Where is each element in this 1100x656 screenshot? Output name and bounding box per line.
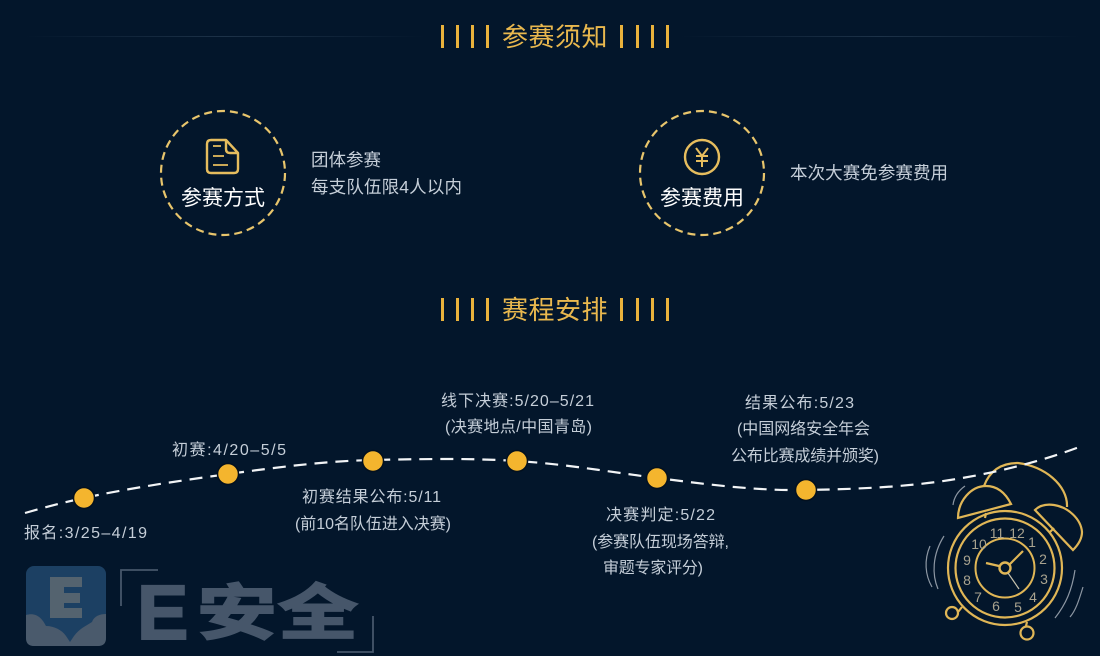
icon: alarm clock: [926, 463, 1083, 640]
clock numerals: 4: [1029, 589, 1037, 605]
heading: 参赛须知: [441, 22, 669, 52]
milestone: 决赛判定: [592, 468, 729, 577]
milestone: 决赛判定: (参赛队伍现场答辩,: [592, 532, 729, 551]
watermark wordmark: E: [137, 570, 188, 656]
clock numerals: 1: [1028, 534, 1036, 550]
clock numerals: 12: [1009, 525, 1025, 541]
bracket lines: [121, 570, 373, 652]
dashed circle badge: [161, 111, 285, 235]
text block: team rules: 团体参赛: [311, 150, 381, 170]
clock numerals: 8: [963, 572, 971, 588]
milestone: 决赛判定: 审题专家评分): [603, 559, 703, 577]
clock numerals: 2: [1039, 551, 1047, 567]
vibration lines: [926, 486, 1083, 618]
heading: 赛程安排: [441, 295, 669, 325]
badge label: 参赛费用: [660, 187, 744, 210]
logo tile: [26, 566, 106, 646]
milestone: 初赛: [172, 440, 286, 484]
text block: team rules: 每支队伍限4人以内: [311, 177, 462, 197]
milestone: 结果公布: (中国网络安全年会: [737, 419, 870, 438]
watermark wordmark: 安: [197, 580, 277, 647]
milestone: 初赛结果公布: [295, 450, 451, 533]
milestone: 初赛结果公布: (前10名队伍进入决赛): [295, 514, 451, 533]
timeline curve: [25, 446, 1082, 513]
watermark wordmark: [137, 570, 358, 656]
milestone: 初赛结果公布: 初赛结果公布:5/11: [302, 487, 441, 506]
clock numerals: 7: [974, 589, 982, 605]
milestone: 决赛判定: 决赛判定:5/22: [606, 505, 715, 524]
clock numerals: 5: [1014, 599, 1022, 615]
milestone: 线下决赛: [441, 391, 594, 472]
clock numerals: [963, 525, 1048, 615]
watermark logo: E安全: [26, 566, 373, 656]
panel: 参赛费用: [640, 111, 948, 235]
clock numerals: 11: [990, 525, 1004, 541]
text block: team rules: [311, 150, 462, 197]
heading: 赛程安排: 赛程安排: [502, 295, 608, 325]
icon: yen coin: [685, 140, 719, 174]
milestone: 结果公布: 结果公布:5/23: [745, 394, 854, 412]
icon: document: [207, 140, 238, 173]
panel: 参赛方式: [161, 111, 462, 235]
clock numerals: 6: [992, 598, 1000, 614]
badge label: 参赛方式: [181, 187, 265, 210]
watermark wordmark: 全: [278, 580, 358, 647]
clock numerals: 10: [971, 536, 987, 552]
milestone: 报名: 报名:3/25–4/19: [24, 524, 147, 542]
milestone: 结果公布: [731, 394, 879, 500]
milestone: 报名: [24, 488, 147, 542]
milestone: 线下决赛: 线下决赛:5/20–5/21: [441, 391, 594, 410]
heading: 参赛须知: 参赛须知: [502, 22, 608, 52]
text block: fee: 本次大赛免参赛费用: [790, 163, 948, 183]
clock numerals: 9: [963, 552, 971, 568]
milestone: 结果公布: 公布比赛成绩并颁奖): [731, 446, 879, 465]
dashed circle badge: [640, 111, 764, 235]
milestone: 线下决赛: (决赛地点/中国青岛): [445, 417, 592, 436]
clock numerals: 3: [1040, 571, 1048, 587]
milestone: 初赛: 初赛:4/20–5/5: [172, 440, 286, 459]
